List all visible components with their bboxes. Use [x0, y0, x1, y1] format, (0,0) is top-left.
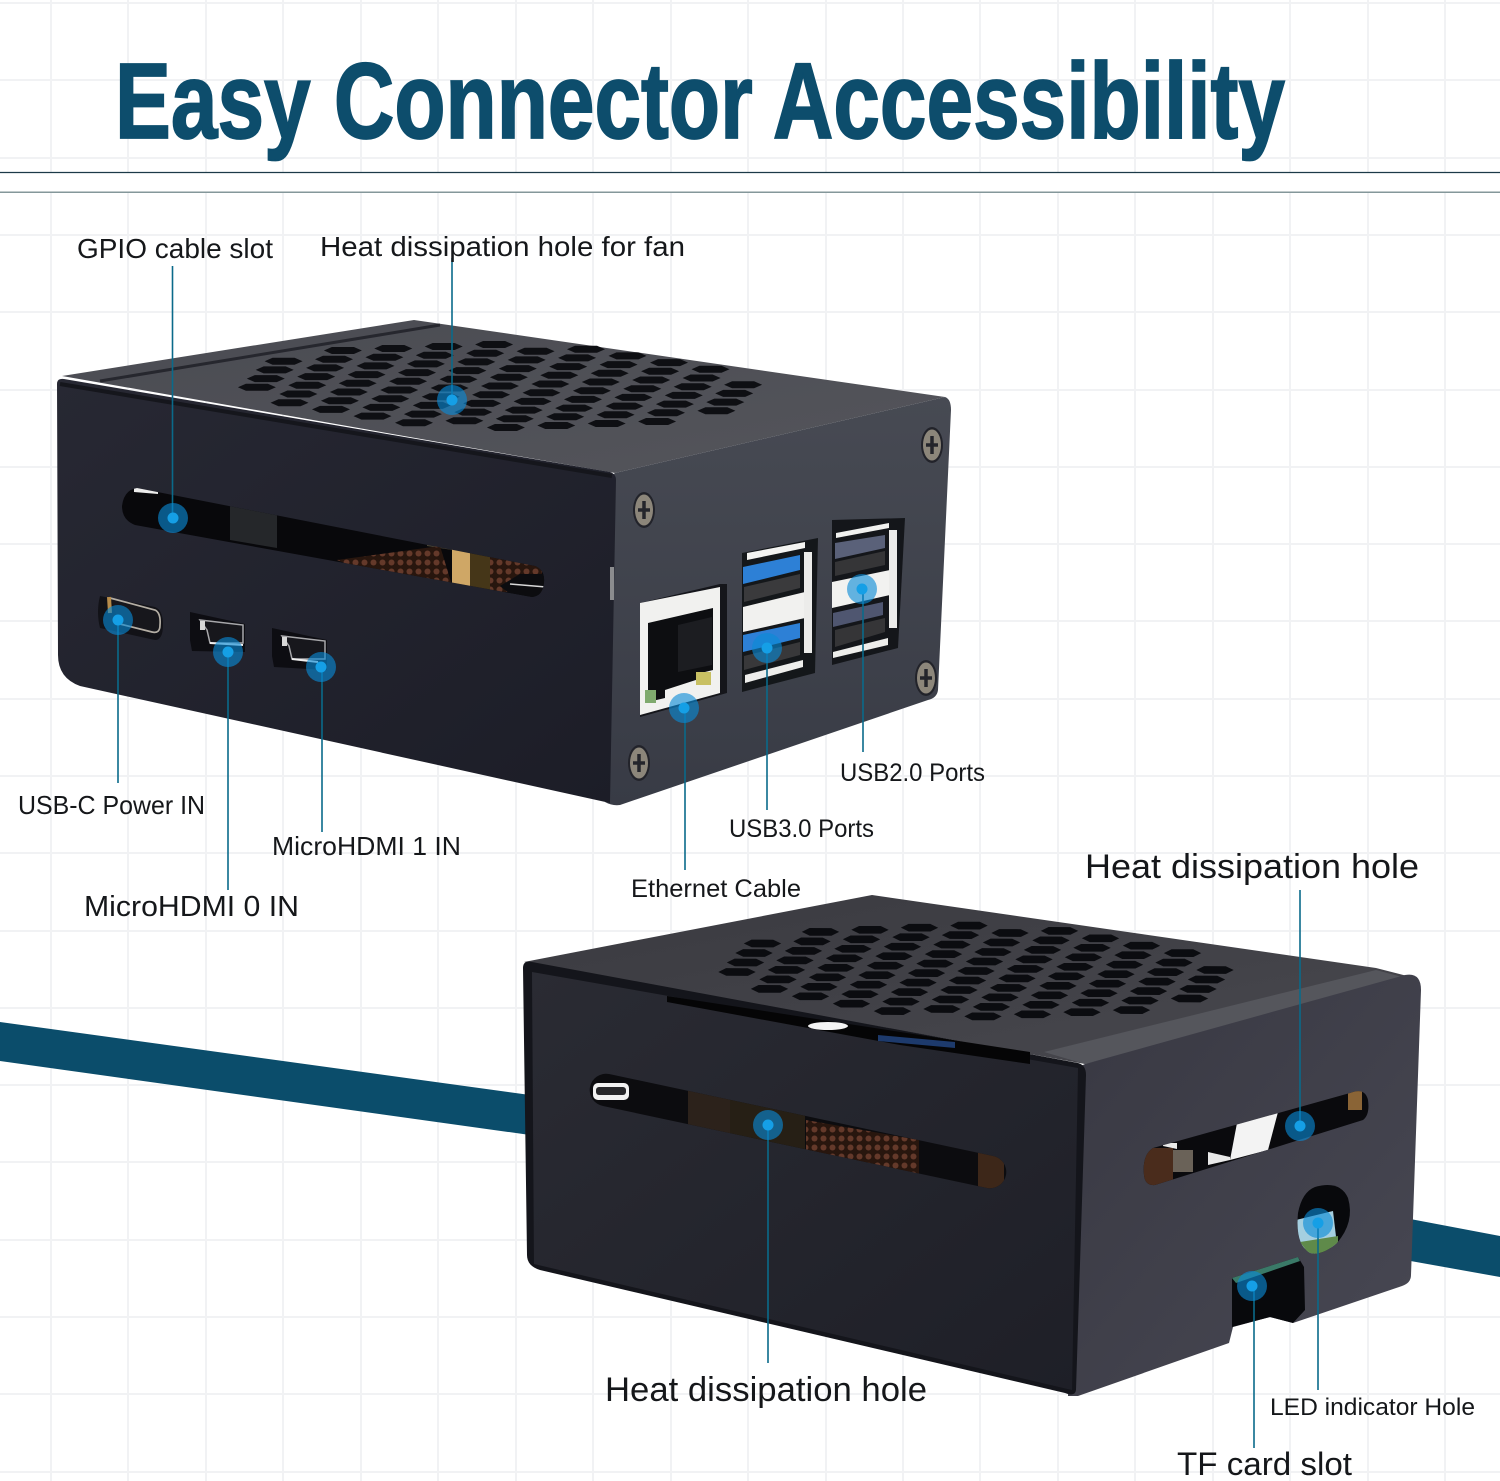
- case 2 front face: [523, 962, 1086, 1394]
- case 2 right face: [1068, 975, 1421, 1396]
- label: ethernet cable: Ethernet Cable: [631, 875, 801, 903]
- panel screws: [628, 427, 943, 781]
- micro HDMI 0 port: [190, 612, 245, 652]
- ethernet port: [640, 584, 727, 717]
- case 1 right face: [605, 397, 951, 805]
- USB-C port: [98, 596, 163, 640]
- TF card notch: [1232, 1257, 1305, 1327]
- case 2: rear side view: [478, 895, 1474, 1396]
- label: TF card slot: TF card slot: [1177, 1446, 1352, 1481]
- case 2 top face: [524, 895, 1415, 1064]
- label: MicroHDMI 1 in: MicroHDMI 1 IN: [272, 831, 461, 861]
- label: LED indicator hole: LED indicator Hole: [1270, 1394, 1475, 1421]
- label: GPIO cable slot: GPIO cable slot: [77, 233, 273, 264]
- case 1: port side view: [57, 320, 951, 806]
- teal diagonal band: [0, 1022, 1500, 1277]
- label: MicroHDMI 0 in: MicroHDMI 0 IN: [84, 891, 299, 923]
- label: USB2.0 ports: USB2.0 Ports: [840, 759, 985, 787]
- case 2 front slot: [590, 1074, 1006, 1190]
- callout lines: [118, 258, 1318, 1448]
- case 2 honeycomb vent: [478, 919, 1474, 1023]
- label: heat dissipation hole for fan: Heat dissipation hole for fan: [320, 231, 685, 262]
- case 1 top rib: [100, 325, 440, 381]
- USB 3.0 ports: [742, 538, 818, 692]
- label: USB-C power in: USB-C Power IN: [18, 790, 205, 820]
- micro HDMI 1 port: [272, 628, 327, 670]
- case 1 top face: [62, 320, 945, 473]
- case 1 front face: [57, 379, 616, 803]
- label: heat dissipation hole, side: Heat dissipation hole: [1085, 848, 1419, 886]
- label: heat dissipation hole, front: Heat dissipation hole: [605, 1371, 927, 1409]
- case 2 right rib: [1044, 970, 1417, 1064]
- LED indicator hole: [1296, 1185, 1350, 1258]
- case 2 top gap: [667, 996, 1030, 1064]
- case 1 GPIO slot: [122, 486, 546, 600]
- callout dots: [103, 385, 1333, 1301]
- USB 2.0 ports: [832, 518, 905, 665]
- case 1 honeycomb vent: [0, 338, 1005, 434]
- label: USB3.0 ports: USB3.0 Ports: [729, 815, 874, 843]
- case 2 side slot: [1143, 1090, 1368, 1188]
